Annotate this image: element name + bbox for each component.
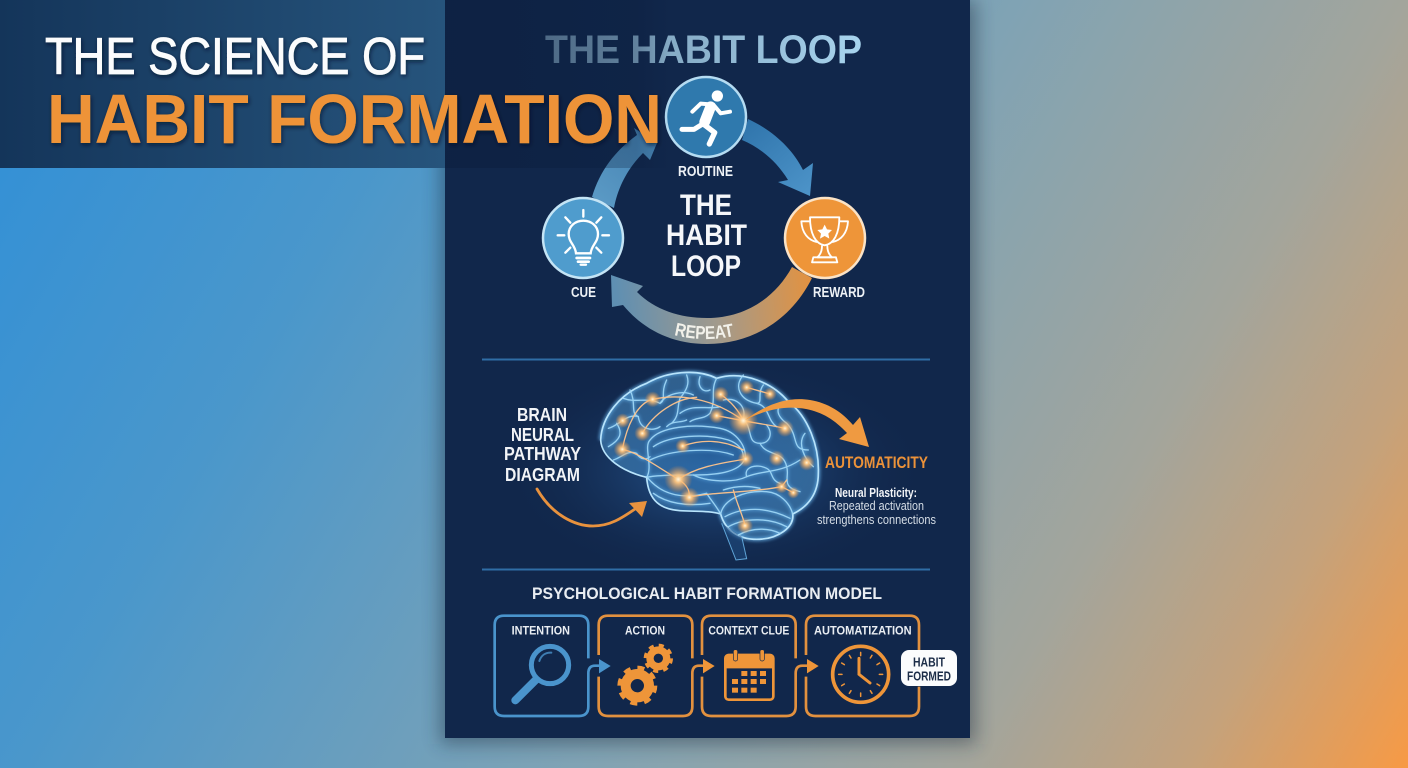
repeat label: REPEAT bbox=[675, 322, 732, 340]
routine label: ROUTINE bbox=[678, 164, 733, 180]
icon: light bulb bbox=[558, 210, 609, 265]
main title: HABIT FORMATION bbox=[47, 80, 662, 158]
cue label: CUE bbox=[571, 285, 596, 301]
section: psychological model bbox=[482, 570, 957, 716]
brain label: BRAIN bbox=[517, 404, 567, 425]
step: automatization bbox=[806, 616, 919, 716]
brain label: NEURAL bbox=[511, 424, 574, 445]
brain label: PATHWAY bbox=[504, 443, 582, 464]
badge: habit formed: HABIT bbox=[913, 656, 945, 670]
badge: habit formed: FORMED bbox=[907, 670, 951, 684]
poster title: THE HABIT LOOP bbox=[545, 28, 862, 72]
brain illustration bbox=[601, 372, 818, 560]
reward label: REWARD bbox=[813, 285, 865, 301]
centre label bbox=[666, 189, 747, 283]
node: routine bbox=[666, 77, 746, 157]
step: context clue: CONTEXT CLUE bbox=[708, 623, 789, 637]
brain label bbox=[504, 404, 582, 485]
node: cue bbox=[543, 198, 623, 278]
step: intention bbox=[495, 616, 611, 716]
step: action bbox=[599, 616, 715, 716]
section: brain neural pathway bbox=[482, 358, 936, 582]
main title bbox=[45, 28, 662, 158]
poster shadow bbox=[440, 0, 976, 744]
arrow: label to brain bbox=[537, 489, 647, 526]
model heading: PSYCHOLOGICAL HABIT FORMATION MODEL bbox=[532, 584, 882, 603]
automaticity label: AUTOMATICITY bbox=[825, 453, 929, 472]
neural plasticity note: Neural Plasticity: bbox=[835, 486, 917, 500]
icon: trophy bbox=[801, 217, 848, 262]
main title: THE SCIENCE OF bbox=[45, 28, 425, 86]
neural plasticity note: strengthens connections bbox=[817, 513, 936, 527]
centre label: LOOP bbox=[671, 250, 741, 283]
centre label: HABIT bbox=[666, 219, 747, 252]
icon: magnifier bbox=[515, 646, 569, 700]
arrow: brain to automaticity bbox=[745, 399, 869, 447]
icon: gears bbox=[620, 646, 671, 703]
diagram: habit loop bbox=[542, 76, 866, 344]
step: context clue bbox=[702, 616, 819, 716]
brain label: DIAGRAM bbox=[505, 464, 580, 485]
icon: running figure bbox=[682, 90, 730, 144]
icon: calendar bbox=[725, 650, 773, 700]
panel: poster bbox=[445, 0, 970, 738]
node: reward bbox=[785, 198, 865, 278]
step: action: ACTION bbox=[625, 623, 665, 637]
icon: clock bbox=[833, 646, 889, 702]
header band bbox=[0, 0, 670, 168]
arrow: cue to routine bbox=[592, 128, 657, 208]
arrow: reward to cue repeat bbox=[611, 267, 812, 344]
step: automatization: AUTOMATIZATION bbox=[814, 623, 912, 637]
centre label: THE bbox=[680, 189, 732, 222]
badge: habit formed bbox=[901, 650, 957, 686]
step: intention: INTENTION bbox=[512, 623, 570, 637]
neural plasticity note bbox=[817, 486, 936, 527]
neural plasticity note: Repeated activation bbox=[829, 499, 924, 513]
arrow: routine to reward bbox=[742, 119, 813, 196]
